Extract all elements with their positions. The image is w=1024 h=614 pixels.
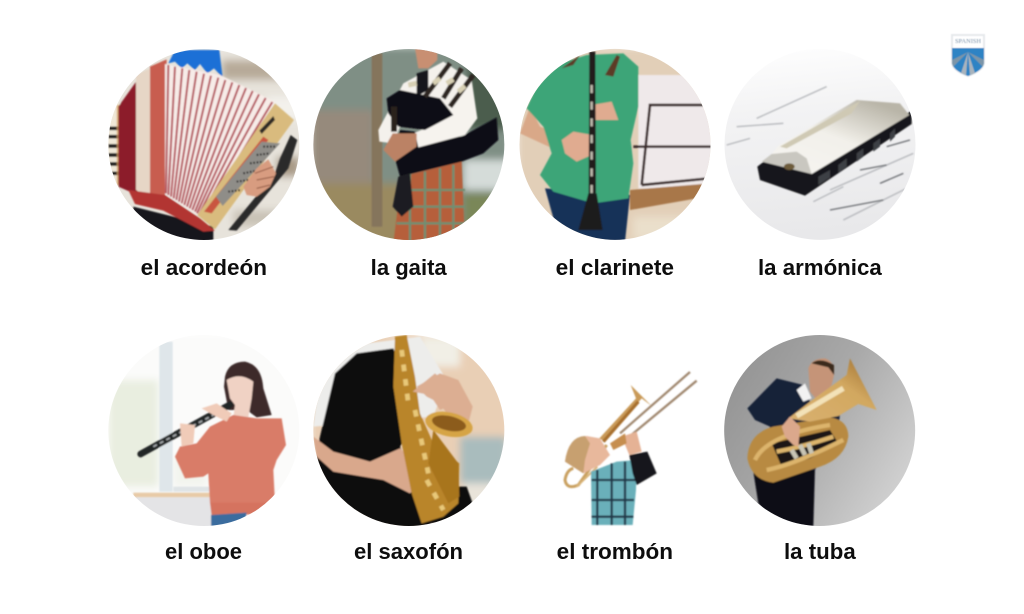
photo background — [310, 333, 510, 533]
staves — [727, 87, 913, 220]
label: la gaita: la gaita — [371, 255, 447, 280]
face and neck — [227, 376, 253, 417]
label: el acordeón: el acordeón — [141, 255, 267, 280]
harmonica comb — [757, 111, 912, 196]
white shirt — [313, 337, 447, 427]
arms — [520, 107, 587, 157]
green shirt — [527, 53, 638, 203]
jeans — [211, 513, 247, 530]
hair — [562, 55, 620, 77]
black vest and bag — [417, 70, 428, 97]
hand — [782, 417, 800, 447]
white sleeve — [415, 80, 477, 147]
arm upper — [417, 373, 473, 423]
plaid shirt — [591, 460, 637, 525]
panel: el saxofón — [310, 333, 510, 533]
floor — [630, 183, 710, 210]
bellows — [165, 64, 275, 218]
trousers — [753, 468, 815, 527]
panel: la tuba — [720, 333, 920, 533]
player dark clothing — [133, 207, 213, 243]
accordion body — [118, 80, 137, 195]
lower bag — [394, 117, 498, 177]
black dress — [313, 348, 433, 530]
panel: el oboe — [108, 341, 287, 526]
kilt — [393, 162, 465, 243]
trombone lower loop — [565, 445, 607, 487]
hand — [243, 159, 276, 197]
panel: el trombón — [565, 372, 697, 525]
drones — [425, 63, 473, 107]
sheet music background — [724, 77, 916, 240]
label: el saxofón: el saxofón — [354, 539, 463, 564]
photo background — [112, 49, 300, 240]
oboe — [141, 405, 230, 454]
hands — [202, 403, 232, 422]
saxophone — [393, 335, 459, 523]
icon: school logo shield — [951, 34, 985, 78]
label: la armónica: la armónica — [758, 255, 882, 280]
label: la tuba: la tuba — [784, 539, 856, 564]
hair — [224, 362, 272, 417]
trombone bell — [599, 385, 652, 442]
photo background — [310, 47, 510, 247]
sill and wall — [133, 493, 213, 497]
right keyboard panel — [197, 103, 294, 229]
trousers — [545, 188, 630, 242]
saxophone bell — [423, 408, 475, 441]
boy head — [565, 436, 610, 473]
bright window background — [108, 376, 208, 491]
tuba bell — [788, 358, 877, 422]
clarinet — [589, 52, 596, 193]
sweater — [175, 415, 286, 503]
tuba body — [747, 417, 848, 483]
keyboard — [108, 102, 122, 188]
head — [415, 48, 437, 68]
bass buttons — [216, 142, 280, 206]
keys hand — [413, 373, 452, 410]
window frame — [159, 342, 173, 492]
black sleeve — [629, 452, 657, 485]
trombone slide — [620, 372, 697, 442]
lower arm and hand — [313, 437, 422, 493]
label: el oboe: el oboe — [165, 539, 242, 564]
chanter and hand — [390, 106, 398, 133]
panel: la gaita — [310, 47, 510, 247]
grey background — [720, 333, 920, 533]
jacket — [747, 378, 840, 473]
hands — [592, 102, 618, 120]
white shirt: torso and left arm — [378, 62, 472, 143]
logo wordmark: SPANISH — [955, 39, 982, 45]
panel: la armónica — [724, 77, 916, 240]
valves — [792, 443, 812, 458]
harmonica silver cover — [810, 99, 910, 176]
hand — [622, 432, 642, 455]
blue shirt — [168, 50, 223, 77]
label: el clarinete: el clarinete — [556, 255, 674, 280]
music stand and paper — [638, 75, 712, 188]
panel: el acordeón — [107, 47, 307, 247]
head — [808, 358, 834, 402]
photo background — [517, 47, 717, 247]
panel: el clarinete — [517, 47, 717, 247]
label: el trombón: el trombón — [557, 539, 673, 564]
sporran — [393, 173, 413, 217]
